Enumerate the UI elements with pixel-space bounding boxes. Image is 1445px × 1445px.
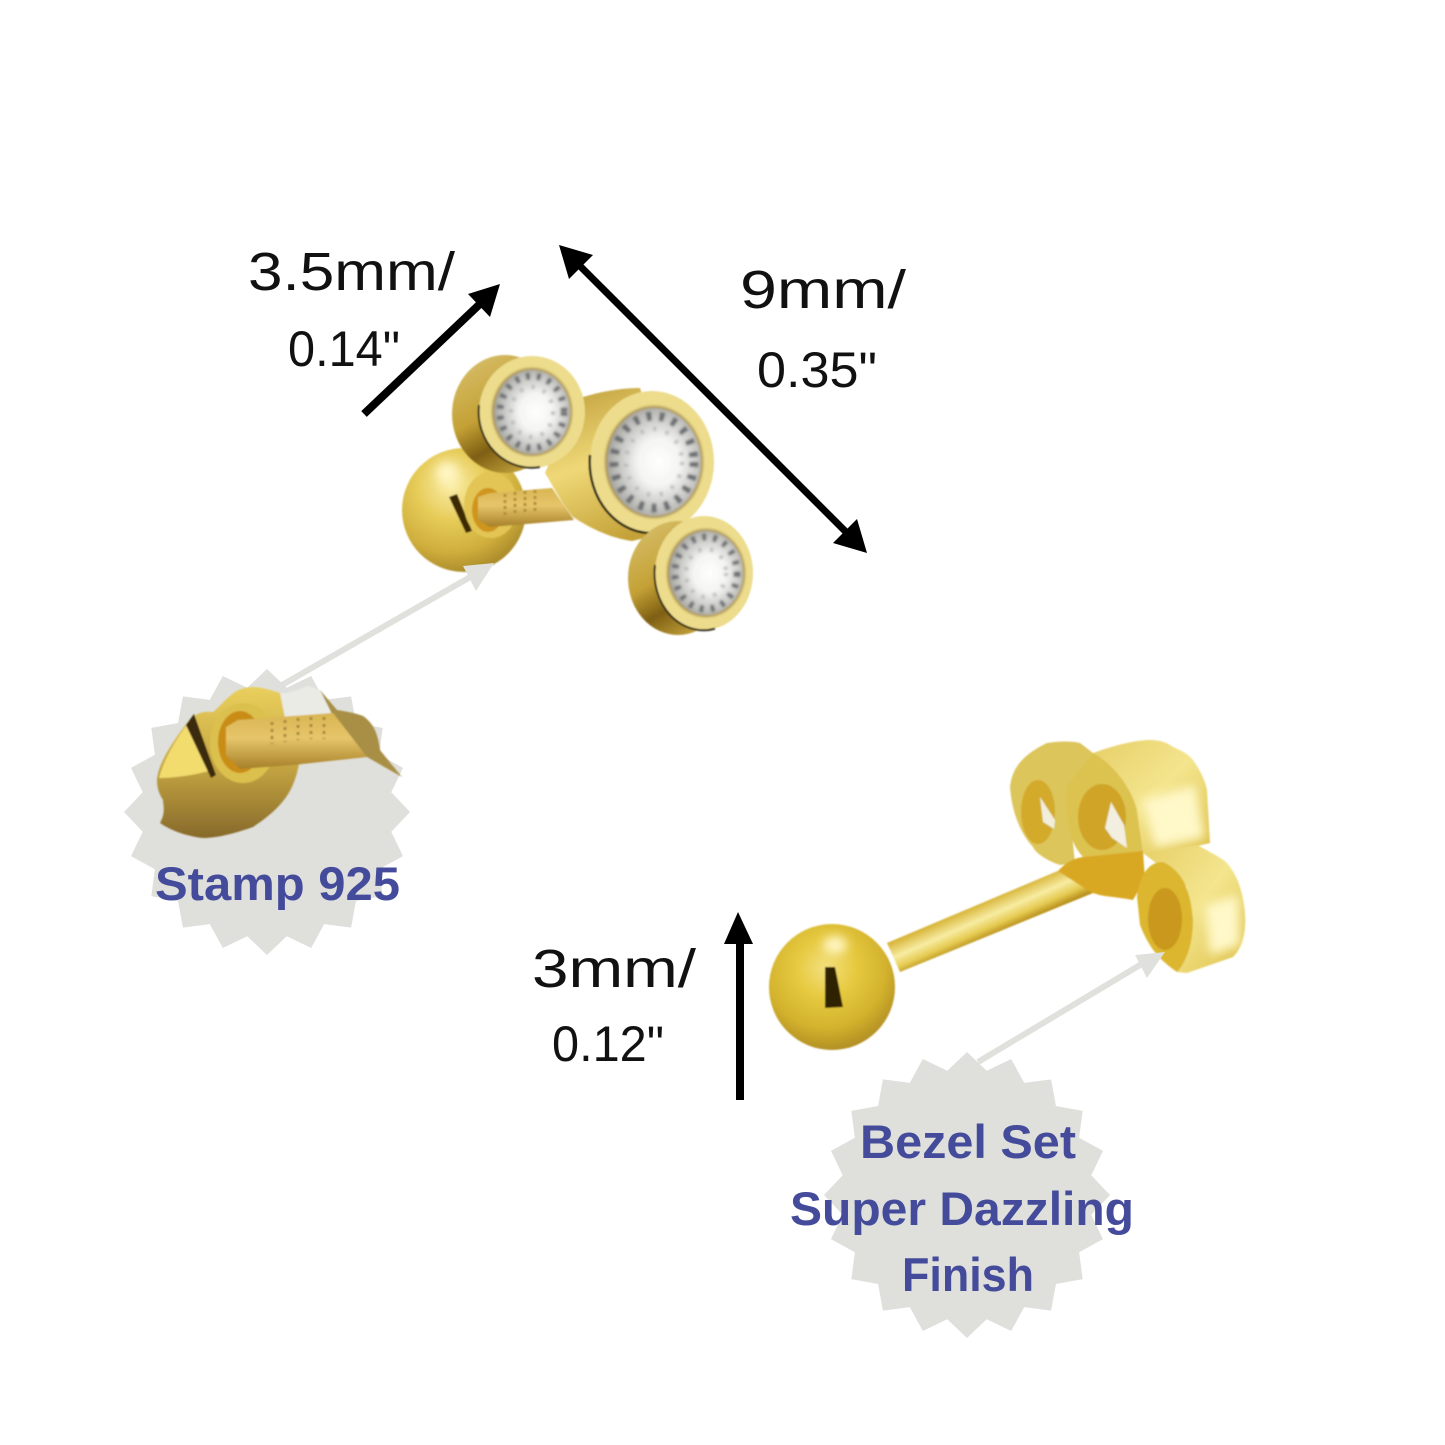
lower body: [1143, 845, 1245, 973]
collar: [210, 703, 276, 783]
centre ring stone: [1105, 802, 1127, 848]
centre ring: [1066, 753, 1143, 857]
bottom setting face: [655, 516, 753, 630]
ball: [769, 924, 895, 1050]
collar inner: [218, 711, 262, 773]
bottom setting side: [628, 521, 728, 635]
ball highlight: [436, 462, 458, 484]
post: [478, 488, 574, 527]
bottom gem: [668, 530, 744, 616]
top setting side: [452, 355, 558, 473]
arrow: 3mm height dimension: [724, 912, 753, 1100]
badge: stamp 925: [124, 669, 410, 955]
text: 3.5mm / 0.14 inch: [248, 242, 455, 377]
ball dark reflection: [449, 494, 472, 533]
left ring: [1010, 742, 1093, 865]
text: 9mm / 0.35 inch: 0.35": [757, 342, 877, 398]
text: 9mm / 0.35 inch: 9mm/: [740, 260, 906, 320]
label: super dazzling: Super Dazzling: [790, 1182, 1134, 1235]
text: 9mm / 0.35 inch: [740, 260, 906, 398]
label: stamp 925: Stamp 925: [155, 857, 400, 910]
joint: [1058, 851, 1145, 900]
ball highlight: [823, 936, 847, 954]
marks: [272, 717, 324, 744]
lower highlight: [1205, 895, 1240, 955]
badge: bezel set: [790, 1052, 1134, 1338]
collar: [464, 472, 518, 538]
collar inner ring: [472, 488, 504, 532]
lower ring hole: [1148, 888, 1182, 950]
ball reflection: [825, 967, 843, 1008]
large gem: [606, 407, 702, 517]
label: bezel set: Bezel Set: [860, 1115, 1076, 1168]
top setting face: [479, 356, 585, 468]
bottom setting shadow arc: [654, 565, 715, 630]
arrow: 9mm length dimension: [559, 245, 867, 553]
dark reflection: [186, 714, 216, 778]
stamp dots: [505, 490, 535, 516]
text: 3.5mm / 0.14 inch: 0.14": [288, 321, 400, 377]
arrow: bezel callout pointer: [978, 952, 1165, 1062]
top gem: [493, 369, 571, 455]
glint: [280, 686, 337, 718]
arrow: stamp callout pointer: [282, 563, 494, 685]
label: finish: Finish: [902, 1248, 1034, 1301]
wedge: [320, 690, 402, 777]
large setting face: [590, 391, 714, 533]
post: [226, 713, 367, 769]
text: 3mm / 0.12 inch: 0.12": [552, 1016, 664, 1072]
highlight: [159, 726, 213, 778]
left ring hole: [1021, 780, 1055, 844]
text: 3.5mm / 0.14 inch: 3.5mm/: [248, 242, 455, 302]
arrow: 3.5mm width dimension: [364, 284, 500, 414]
starburst background: [124, 669, 410, 955]
top setting shadow arc: [479, 405, 540, 468]
starburst background: [824, 1052, 1110, 1338]
text: 3mm / 0.12 inch: [532, 939, 696, 1072]
upper body: [1093, 740, 1210, 853]
left ring stone: [1040, 797, 1055, 829]
large setting body: [545, 388, 680, 541]
lower ring: [1137, 862, 1193, 972]
large setting shadow arc: [590, 455, 665, 533]
earring back view: [769, 740, 1245, 1050]
earring front view: [402, 355, 753, 635]
text: 3mm / 0.12 inch: 3mm/: [532, 939, 696, 999]
ball: [402, 448, 526, 572]
upper highlight: [1142, 785, 1205, 848]
centre ring hole: [1078, 784, 1126, 850]
post: [887, 870, 1093, 972]
ball: [157, 687, 300, 838]
stamp close-up photo: [157, 686, 402, 838]
